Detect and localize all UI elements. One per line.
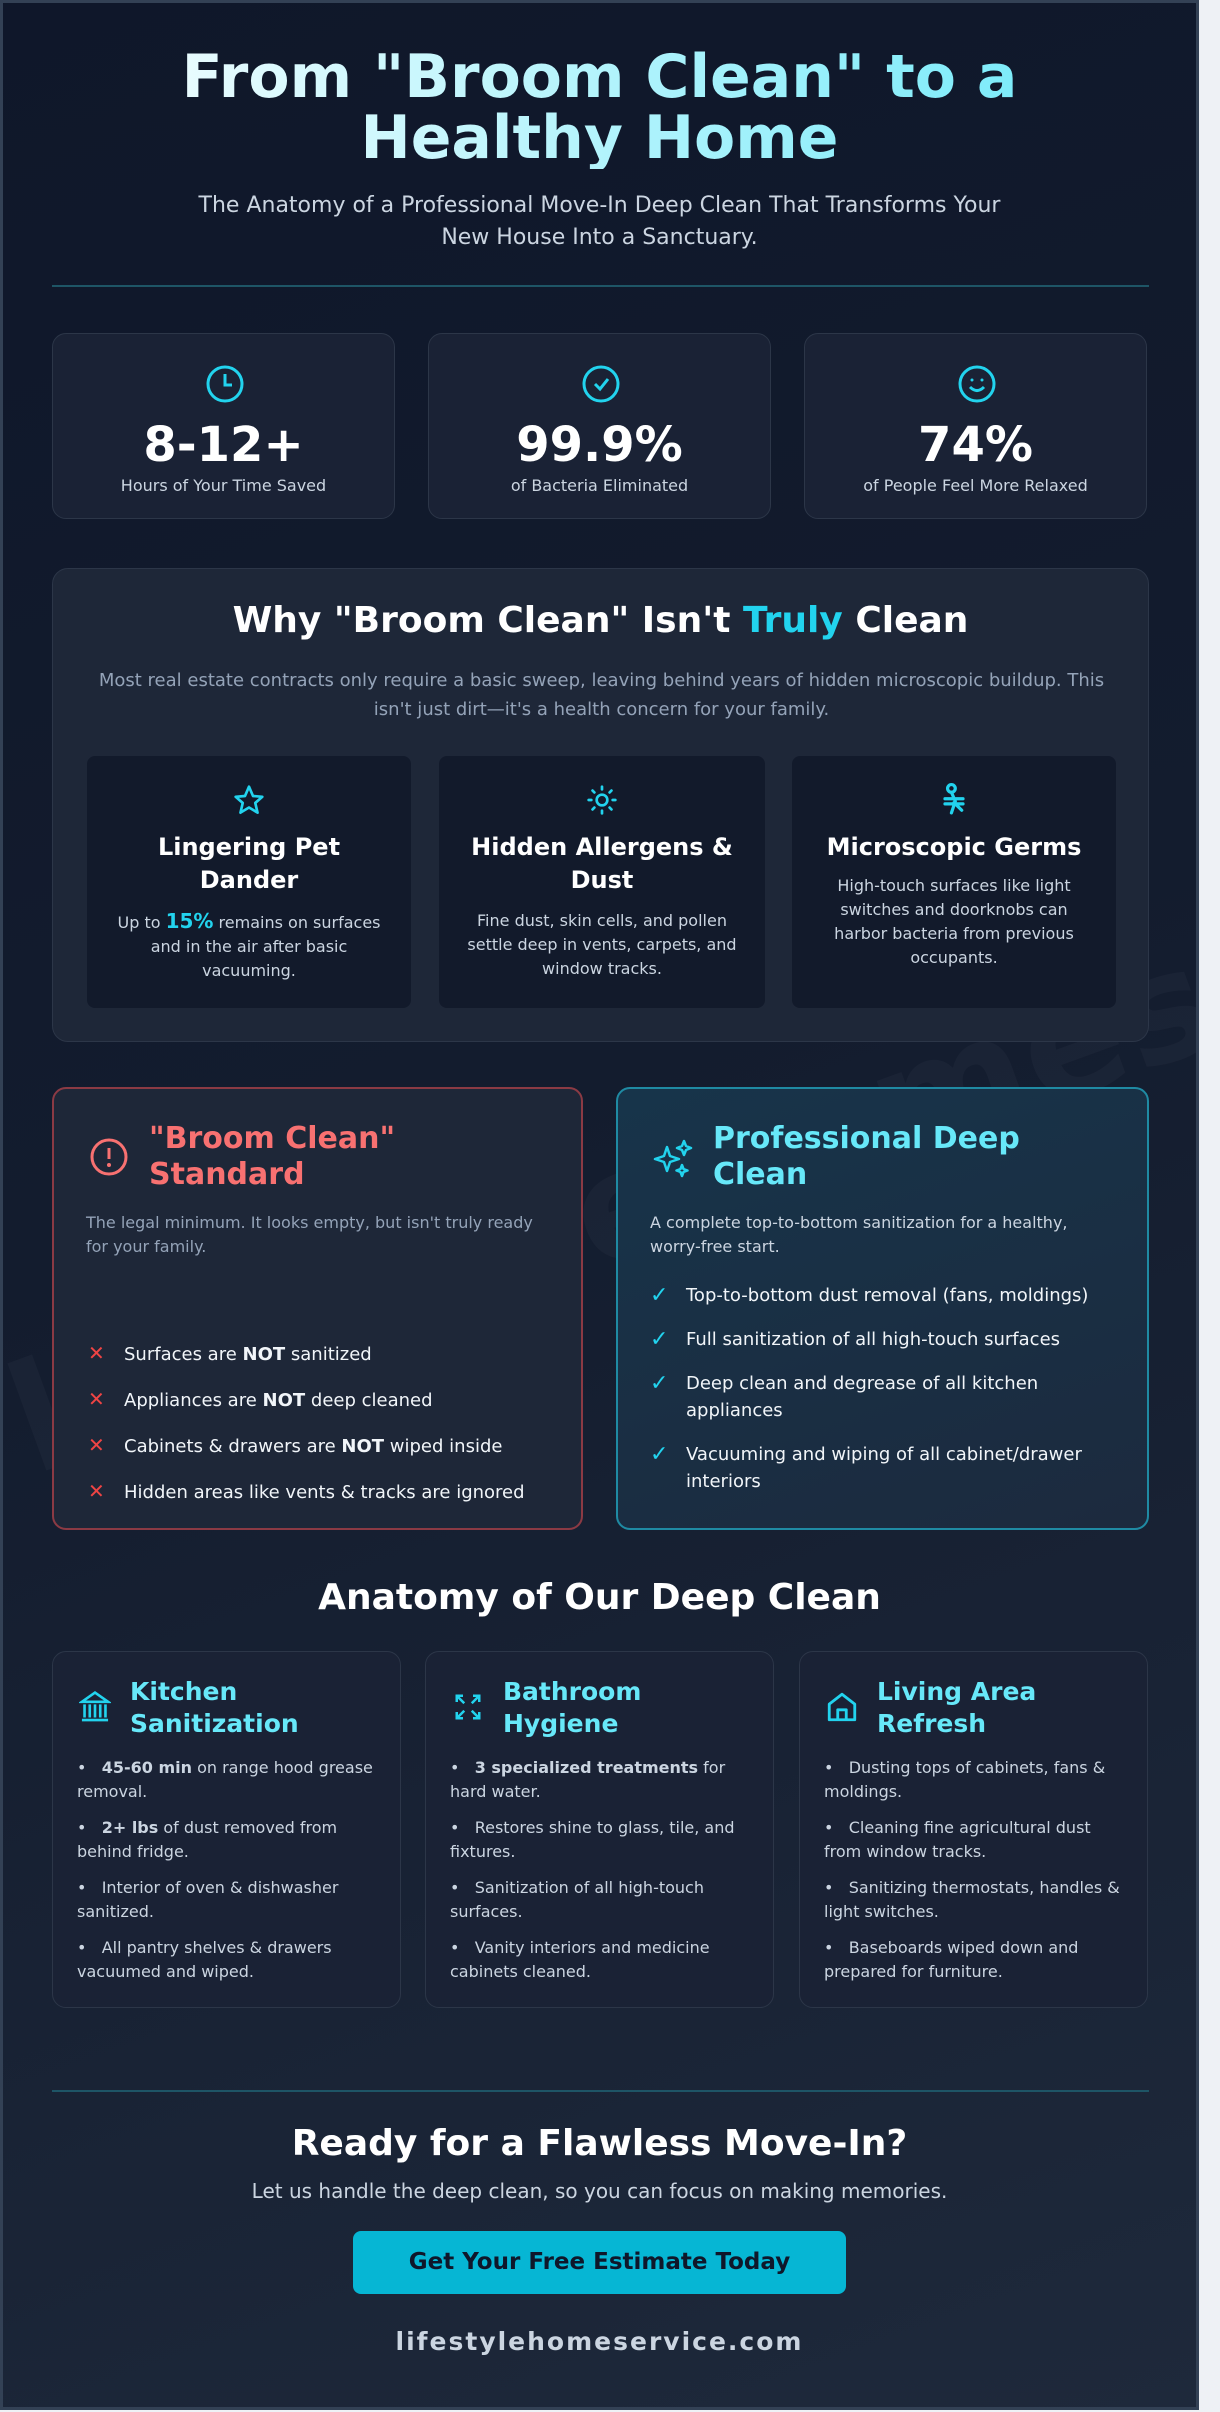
list: not included: Surfaces are NOT sanitized bbox=[124, 1344, 372, 1365]
list: not included: Cabinets & drawers are NOT wiped inside bbox=[124, 1436, 502, 1457]
card: living area bbox=[799, 1651, 1148, 2008]
card: kitchen bbox=[52, 1651, 401, 2008]
panel: broom clean standard bbox=[52, 1087, 583, 1530]
heading bbox=[149, 1121, 395, 1192]
card: kitchen: • Interior of oven & dishwasher sanitized. bbox=[77, 1878, 338, 1921]
panel: professional deep clean bbox=[616, 1087, 1149, 1530]
icon: expand arrows bbox=[456, 1694, 480, 1720]
intro text: Most real estate contracts only require a basic sweep, leaving behind years of hidden microscopic buildup. This isn't just dirt—it's a health concern for your family. bbox=[99, 670, 1104, 720]
list: not included: ✕ bbox=[88, 1387, 105, 1411]
list: not included: Appliances are NOT deep cleaned bbox=[124, 1390, 433, 1411]
title: From "Broom Clean" to a bbox=[182, 42, 1017, 112]
list: included: ✓ bbox=[650, 1327, 668, 1352]
list: not included: ✕ bbox=[88, 1433, 105, 1457]
list: included: Full sanitization of all high-touch surfaces bbox=[686, 1329, 1060, 1350]
card: germs: Microscopic Germs bbox=[827, 833, 1081, 861]
icon: check circle bbox=[582, 366, 620, 402]
list: included: Vacuuming and wiping of all cabinet/drawer interiors bbox=[686, 1444, 1082, 1492]
title: Healthy Home bbox=[360, 103, 838, 173]
stat: bacteria: 99.9% bbox=[516, 417, 683, 473]
subtitle: The Anatomy of a Professional Move-In Deep Clean That Transforms Your New House Into a Sanctuary. bbox=[199, 193, 1000, 250]
card: kitchen: • All pantry shelves & drawers vacuumed and wiped. bbox=[77, 1938, 332, 1981]
stat: relaxed: 74% bbox=[918, 417, 1033, 473]
heading: Professional Deep bbox=[713, 1121, 1020, 1156]
card: pet dander: Lingering Pet Dander bbox=[158, 833, 340, 894]
icon: sun bbox=[587, 785, 617, 815]
icon: star bbox=[234, 785, 264, 814]
list: included: Deep clean and degrease of all kitchen appliances bbox=[686, 1373, 1038, 1421]
card: allergens bbox=[439, 756, 765, 1008]
list: included: Top-to-bottom dust removal (fans, moldings) bbox=[686, 1285, 1088, 1306]
icon: germ bbox=[943, 783, 965, 814]
card: living area: Living Area bbox=[877, 1677, 1036, 1706]
icon: building bbox=[79, 1691, 111, 1722]
stat: bacteria bbox=[428, 333, 771, 519]
card: bathroom: • Restores shine to glass, tile, and fixtures. bbox=[450, 1818, 734, 1861]
stat: relaxed bbox=[804, 333, 1147, 519]
cta heading: Ready for a Flawless Move-In? bbox=[292, 2123, 907, 2164]
list: included: ✓ bbox=[650, 1283, 668, 1308]
list: included: ✓ bbox=[650, 1371, 668, 1396]
list: included bbox=[650, 1283, 1088, 1492]
cta button: Get Your Free Estimate Today bbox=[409, 2249, 790, 2275]
icon: clock bbox=[206, 366, 244, 402]
card: bathroom: • 3 specialized treatments for hard water. bbox=[450, 1758, 725, 1801]
card: bathroom bbox=[425, 1651, 774, 2008]
card: allergens: Hidden Allergens & Dust bbox=[471, 833, 733, 894]
card: bathroom: Bathroom bbox=[503, 1677, 641, 1706]
stat: hours saved: Hours of Your Time Saved bbox=[121, 476, 326, 495]
heading: Clean bbox=[713, 1157, 807, 1192]
card: living area: Refresh bbox=[877, 1709, 986, 1738]
panel: professional deep clean: A complete top-to-bottom sanitization for a healthy, worry-free start. bbox=[650, 1213, 1068, 1256]
panel: why broom clean bbox=[52, 568, 1149, 1042]
website url: lifestylehomeservice.com bbox=[396, 2327, 803, 2356]
list: not included bbox=[88, 1341, 525, 1503]
card: germs bbox=[792, 756, 1116, 1008]
heading: anatomy: Anatomy of Our Deep Clean bbox=[318, 1577, 881, 1618]
cta button bbox=[353, 2231, 846, 2294]
panel: broom clean standard: The legal minimum. It looks empty, but isn't truly ready for your family. bbox=[86, 1213, 533, 1256]
list: not included: Hidden areas like vents & tracks are ignored bbox=[124, 1482, 525, 1503]
list: not included: ✕ bbox=[88, 1341, 105, 1365]
stat: hours saved: 8-12+ bbox=[143, 417, 304, 473]
card: living area: • Dusting tops of cabinets, fans & moldings. bbox=[824, 1758, 1105, 1801]
card: allergens: Fine dust, skin cells, and pollen settle deep in vents, carpets, and window tracks. bbox=[467, 911, 737, 978]
title bbox=[3, 47, 1196, 169]
list: included: ✓ bbox=[650, 1442, 668, 1467]
card: pet dander bbox=[87, 756, 411, 1008]
heading: Why "Broom Clean" Isn't Truly Clean bbox=[233, 600, 968, 641]
icon: sparkles bbox=[654, 1140, 692, 1178]
stat cards bbox=[52, 333, 1147, 519]
stat: hours saved bbox=[52, 333, 395, 519]
anatomy cards bbox=[52, 1651, 1148, 2008]
heading: "Broom Clean" bbox=[149, 1121, 395, 1156]
list: not included: ✕ bbox=[88, 1479, 105, 1503]
cta subtext: Let us handle the deep clean, so you can focus on making memories. bbox=[252, 2179, 947, 2203]
card: bathroom: • Sanitization of all high-touch surfaces. bbox=[450, 1878, 704, 1921]
card: pet dander: Up to 15% remains on surfaces and in the air after basic vacuuming. bbox=[117, 909, 381, 980]
icon: house bbox=[828, 1692, 856, 1722]
card: bathroom: Hygiene bbox=[503, 1709, 618, 1738]
card: bathroom: • Vanity interiors and medicine cabinets cleaned. bbox=[450, 1938, 710, 1981]
card: living area: • Cleaning fine agricultural dust from window tracks. bbox=[824, 1818, 1091, 1861]
card: kitchen: • 45-60 min on range hood grease removal. bbox=[77, 1758, 373, 1801]
card: living area: • Sanitizing thermostats, handles & light switches. bbox=[824, 1878, 1120, 1921]
stat: relaxed: of People Feel More Relaxed bbox=[863, 476, 1088, 495]
card: kitchen: • 2+ lbs of dust removed from behind fridge. bbox=[77, 1818, 337, 1861]
card: kitchen: Kitchen bbox=[130, 1677, 237, 1706]
icon: smile bbox=[958, 366, 996, 402]
stat: bacteria: of Bacteria Eliminated bbox=[511, 476, 688, 495]
card: living area: • Baseboards wiped down and prepared for furniture. bbox=[824, 1938, 1078, 1981]
card: kitchen: Sanitization bbox=[130, 1709, 299, 1738]
heading bbox=[713, 1121, 1020, 1192]
icon: warning bbox=[90, 1138, 128, 1176]
heading: Standard bbox=[149, 1157, 305, 1192]
card: germs: High-touch surfaces like light switches and doorknobs can harbor bacteria from previous occupants. bbox=[834, 876, 1074, 967]
